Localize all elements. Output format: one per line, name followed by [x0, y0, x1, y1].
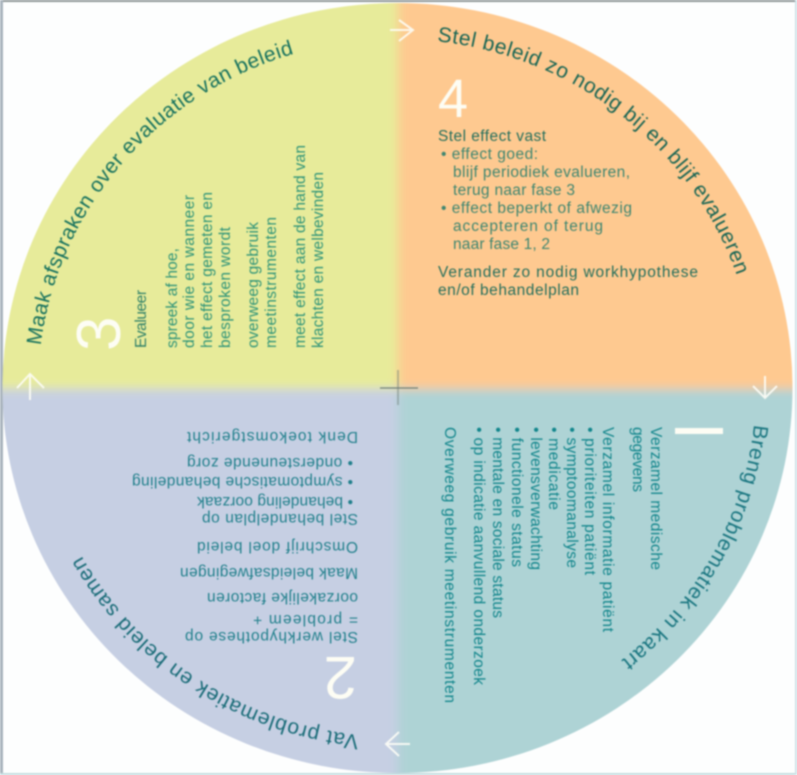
number 2: 2 [324, 644, 357, 711]
arrow: bottom, pointing left [386, 732, 410, 756]
text block: phase 1: gegevens [629, 427, 646, 492]
heading: phase 3: Maak afspraken over evaluatie van beleid [26, 38, 294, 345]
text block: phase 3: het effect gemeten en [199, 192, 216, 348]
text block: phase 4: blijf periodiek evalueren, [453, 164, 630, 181]
text block: phase 2: • behandeling oorzaak [197, 493, 353, 510]
number 3: 3 [65, 317, 134, 351]
arrow: top, pointing right [390, 20, 413, 41]
heading: phase 1: Breng problematiek in kaart [620, 426, 769, 670]
arrow: right, pointing down [753, 376, 777, 398]
text block: phase 4: Verander zo nodig workhypothese [438, 264, 698, 281]
text block: phase 2: • ondersteunende zorg [187, 454, 353, 471]
text block: phase 1: Verzamel medische [647, 427, 664, 570]
text block: phase 1 [441, 427, 664, 703]
text block: phase 4 [438, 128, 698, 299]
text block: phase 2: Stel werkhypothese op [185, 628, 358, 645]
text block: phase 4: • effect beperkt of afwezig [441, 200, 632, 217]
quadrant 4 background: orange [398, 0, 797, 389]
text block: phase 1: Verzamel informatie patiënt [599, 427, 616, 633]
text block: phase 4: • effect goed: [441, 146, 538, 163]
arrow: left, pointing up [17, 374, 44, 400]
quadrant 1 background: teal [398, 389, 797, 775]
text block: phase 1: • medicatie [545, 427, 562, 510]
text block: phase 2: Stel behandelplan op [202, 510, 358, 527]
text block: phase 1: Overweeg gebruik meetinstrumenten [441, 427, 458, 703]
heading: phase 4: Stel beleid zo nodig bij en blijf evalueren [438, 26, 747, 275]
text block: phase 2 [132, 428, 358, 645]
text block: phase 1: • functionele status [508, 427, 525, 567]
text block: phase 4: en/of behandelplan [438, 282, 579, 299]
text block: phase 1: • prioriteiten patiënt [581, 427, 598, 576]
text block: phase 4: naar fase 1, 2 [453, 236, 550, 253]
text block: phase 1: • levensverwachting [527, 427, 544, 570]
text block: phase 3: spreek af hoe, [164, 248, 181, 348]
heading: phase 2: Vat problematiek en beleid samen [72, 556, 358, 750]
quadrant 2 background: lavender [0, 389, 398, 775]
text block: phase 1: • op indicatie aanvullend onderzoek [470, 427, 487, 685]
text block: phase 2: = probleem + [253, 611, 358, 628]
text block: phase 2: Omschrijf doel beleid [197, 538, 358, 555]
text block: phase 3: besproken wordt [217, 226, 234, 348]
number 4: 4 [438, 69, 468, 129]
text block: phase 3: klachten en welbevinden [310, 172, 327, 348]
text block: phase 1: • mentale en sociale status [489, 427, 506, 618]
text block: phase 2: oorzakelijke factoren [207, 589, 358, 606]
text block: phase 1: • symptoomanalyse [563, 427, 580, 568]
quadrant 3 background: yellow-green [0, 0, 398, 389]
number 1: 1 [663, 412, 737, 449]
text block: phase 2: Maak beleidsafwegingen [180, 564, 358, 581]
centre cross [380, 370, 418, 405]
text block: phase 2: Denk toekomstgericht [186, 428, 358, 445]
text block: phase 3: meet effect aan de hand van [292, 145, 309, 348]
text block: phase 2: • symptomatische behandeling [132, 473, 353, 490]
text block: phase 4: Stel effect vast [438, 128, 547, 145]
text block: phase 3: Evalueer [133, 290, 150, 348]
text block: phase 3 [133, 145, 327, 348]
text block: phase 3: meetinstrumenten [263, 217, 280, 348]
text block: phase 4: terug naar fase 3 [453, 182, 575, 199]
text block: phase 3: door wie en wanneer [181, 195, 198, 348]
number 1 [674, 427, 724, 435]
text block: phase 3: overweeg gebruik [245, 222, 262, 348]
text block: phase 4: accepteren of terug [453, 218, 603, 235]
